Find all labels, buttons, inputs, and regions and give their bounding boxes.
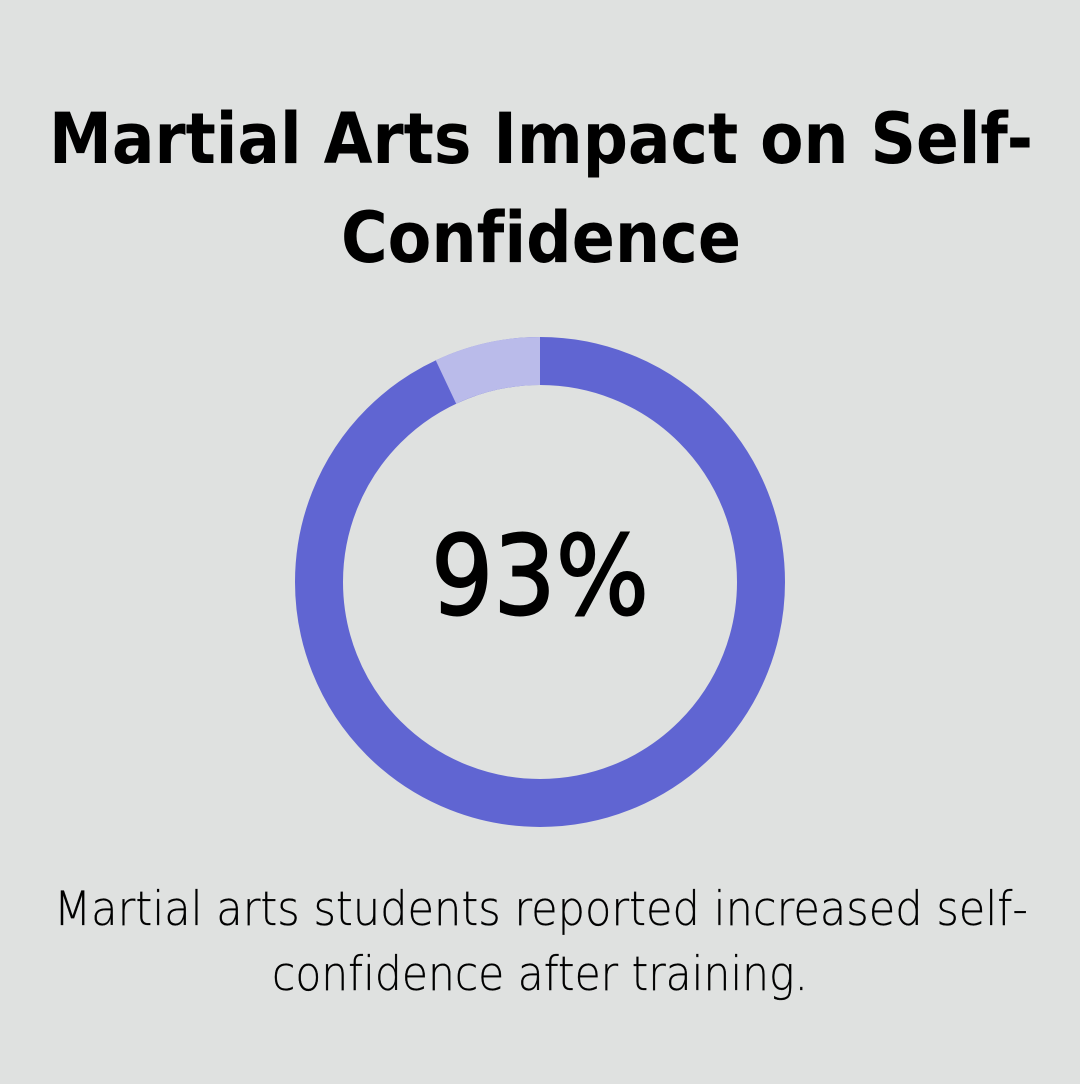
donut chart: 93% xyxy=(319,337,761,803)
title xyxy=(49,98,1033,279)
center value: 93% xyxy=(431,512,649,640)
caption xyxy=(54,882,1028,1002)
remaining 7% segment xyxy=(436,337,540,404)
caption: confidence after training. xyxy=(272,947,808,1002)
title: Confidence xyxy=(341,197,741,279)
